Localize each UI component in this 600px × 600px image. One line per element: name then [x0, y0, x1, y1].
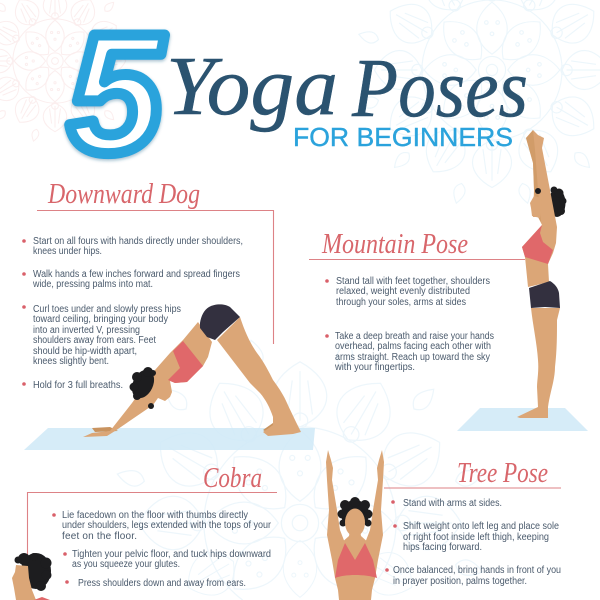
instructions: cobra: feet on the floor.: [62, 531, 137, 542]
instructions: downward dog: knees slightly bent.: [33, 356, 109, 367]
heading: mountain pose: Mountain Pose: [321, 229, 468, 260]
background mandala: lower blue, cut at the page bottom: [115, 335, 488, 600]
instructions: mountain pose: overhead, palms facing each other with: [335, 341, 491, 352]
instructions: cobra: Press shoulders down and away from ears.: [78, 578, 246, 589]
figure: downward dog: [83, 304, 301, 437]
subtitle: FOR BEGINNERS: [293, 122, 513, 152]
instructions: cobra: [52, 510, 272, 589]
panel: mountain pose: [309, 130, 588, 431]
instructions: downward dog: knees under hips.: [33, 246, 102, 257]
instructions: downward dog: into an inverted V, pressing: [33, 325, 140, 336]
instructions: mountain pose: [325, 276, 494, 373]
numeral 5: 5: [68, 0, 165, 189]
panel: downward dog: [22, 179, 315, 450]
instructions: mountain pose: with your fingertips.: [334, 362, 415, 373]
instructions: tree pose: of right foot inside left thigh, keeping: [403, 532, 549, 543]
instructions: downward dog: should be hip-width apart,: [33, 346, 137, 357]
instructions: downward dog: Hold for 3 full breaths.: [33, 380, 123, 391]
yoga mat: mountain pose: [457, 408, 588, 431]
instructions: tree pose: Shift weight onto left leg and place sole: [403, 521, 559, 532]
instructions: tree pose: [385, 498, 561, 587]
instructions: downward dog: wide, pressing palms into mat.: [32, 279, 153, 290]
background mandala: pink: [0, 0, 137, 143]
heading: downward dog: Downward Dog: [47, 179, 200, 210]
title word: Yoga: Yoga: [166, 40, 338, 133]
instructions: downward dog: [22, 236, 243, 391]
figure: mountain pose: [517, 130, 566, 418]
title: [68, 0, 528, 189]
instructions: downward dog: Walk hands a few inches forward and spread fingers: [33, 269, 240, 280]
instructions: mountain pose: arms straight. Reach up toward the sky: [335, 352, 490, 363]
instructions: mountain pose: through your soles, arms at sides: [336, 297, 466, 308]
background mandala: top right blue: [355, 0, 600, 207]
heading rule: [384, 487, 561, 489]
figure: tree pose: [326, 450, 384, 600]
instructions: downward dog: shoulders away from ears. Feet: [33, 335, 156, 346]
instructions: downward dog: Start on all fours with hands directly under shoulders,: [33, 236, 243, 247]
panel: tree pose: [326, 450, 561, 600]
heading rule and bracket: [37, 210, 274, 344]
heading: cobra: Cobra: [203, 463, 262, 494]
heading rule and bracket: [28, 492, 277, 556]
instructions: cobra: Lie facedown on the floor with thumbs directly: [62, 510, 248, 521]
instructions: tree pose: in prayer position, palms together.: [393, 576, 527, 587]
instructions: cobra: Tighten your pelvic floor, and tuck hips downward: [72, 549, 271, 560]
heading rule: [309, 258, 525, 260]
panel: cobra: [12, 463, 277, 600]
instructions: cobra: as you squeeze your glutes.: [72, 559, 180, 570]
instructions: mountain pose: Stand tall with feet together, shoulders: [336, 276, 490, 287]
heading: tree pose: Tree Pose: [457, 458, 548, 489]
figure: cobra: [12, 553, 52, 600]
instructions: downward dog: Curl toes under and slowly press hips: [33, 304, 181, 315]
instructions: tree pose: hips facing forward.: [403, 542, 482, 553]
yoga mat: downward dog: [24, 428, 315, 450]
instructions: downward dog: toward ceiling, bringing your body: [33, 314, 168, 325]
instructions: cobra: under shoulders, legs extended with the tops of your: [62, 520, 272, 531]
instructions: tree pose: Once balanced, bring hands in front of you: [393, 565, 561, 576]
instructions: tree pose: Stand with arms at sides.: [403, 498, 502, 509]
instructions: mountain pose: Take a deep breath and raise your hands: [335, 331, 494, 342]
instructions: mountain pose: relaxed, weight evenly distributed: [336, 286, 470, 297]
title word: Poses: Poses: [351, 42, 528, 135]
